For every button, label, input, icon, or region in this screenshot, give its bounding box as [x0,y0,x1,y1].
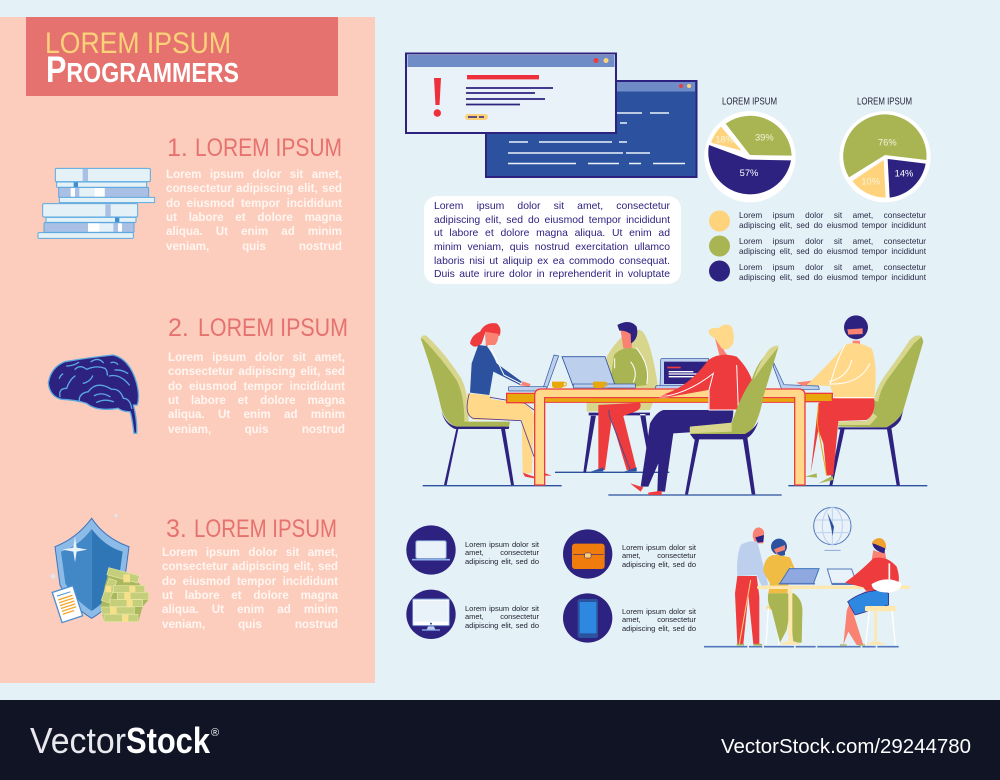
body text 2 [168,351,345,436]
pie chart 1 [704,96,796,202]
legend text green: adipiscing elit, sed do eiusmod tempor incididunt [739,246,926,256]
pie chart 2: 14% [895,168,913,178]
laptop text: adipiscing elit, sed do [465,557,539,566]
image id: VectorStock.com/29244780 [721,735,971,758]
body text 3: Lorem ipsum dolor sit amet, [162,546,338,559]
briefcase text: amet, consectetur [622,551,696,560]
legend text green [739,236,926,256]
pie chart 1: 57% [740,168,758,178]
pie chart 2: 76% [878,138,897,148]
standing man [735,527,768,645]
body text 3: aliqua. Ut enim ad minim [162,603,338,616]
briefcase text [622,543,696,569]
section 1 [38,134,342,253]
pie chart 2 [839,96,931,202]
heading 3: 3. [166,515,187,543]
body text 3: consectetur adipiscing elit, sed [162,560,338,573]
table and laptops [759,569,908,645]
illustration: small team meeting with globe clock [704,506,910,648]
floor lines [423,472,927,495]
pie chart 1: LOREM IPSUM [722,96,777,108]
heading 3: LOREM IPSUM [194,515,337,543]
card paragraph: Duis aute irure dolor in reprehenderit in voluptate [434,269,670,280]
laptop text [465,540,539,566]
chair behind, person 2 [583,330,658,472]
legend text yellow: adipiscing elit, sed do eiusmod tempor incididunt [739,221,926,230]
body text 1 [166,168,342,253]
card paragraph: laboris nisi ut aliquip ex ea commodo consequat. [434,256,670,267]
chair left [421,335,514,485]
body text 1: ut labore et dolore magna [166,211,342,224]
body text 2: Lorem ipsum dolor sit amet, [168,351,345,364]
legend text navy: Lorem ipsum dolor sit amet, consectetur [739,262,926,272]
icon: laptop [406,525,456,575]
monitor text: Lorem ipsum dolor sit [465,604,539,613]
card paragraph: ut labore et dolore magna aliqua. Ut enim ad [434,228,670,239]
laptop text: amet, consectetur [465,548,539,557]
legend text navy: adipiscing elit, sed do eiusmod tempor incididunt [739,272,926,282]
illustration: team working at big table [420,315,928,496]
heading 1: 1. [167,134,188,162]
legend text yellow: Lorem ipsum dolor sit amet, consectetur [739,211,926,220]
icon: brain [48,355,139,433]
heading 1: LOREM IPSUM [195,134,342,162]
logo: Vector [30,720,126,761]
body text 1: aliqua. Ut enim ad minim [166,225,342,238]
phone text: Lorem ipsum dolor sit [622,607,696,616]
body text 1: Lorem ipsum dolor sit amet, [166,168,342,181]
panel: left column [0,17,375,683]
illustration: code window behind and alert window in front [405,52,698,178]
icon: monitor [406,590,456,639]
legend [709,210,926,282]
blond man and front chair [630,325,778,495]
card paragraph: adipiscing elit, sed do eiusmod tempor incididunt [434,215,670,226]
card paragraph [434,201,670,280]
pie chart 2: LOREM IPSUM [857,96,912,108]
legend text navy [739,262,926,282]
person 2 [591,322,648,472]
pie chart 1: 18% [715,134,734,144]
logo [30,720,219,761]
laptop text: Lorem ipsum dolor sit [465,540,539,549]
section 3 [50,514,338,631]
icon: briefcase [563,529,612,579]
section 2 [48,314,348,436]
text box: white card [424,196,681,284]
woman with red hair [467,323,552,478]
phone text [622,607,696,633]
feature: smartphone [563,593,696,643]
table [507,389,832,485]
alert window [406,54,616,133]
card paragraph: minim veniam, quis nostrud exercitation ullamco [434,242,670,253]
pie chart 1: 39% [755,133,774,143]
heading 2: 2. [168,314,189,342]
body text 2: aliqua. Ut enim ad minim [168,408,345,421]
body text 2: do eiusmod tempor incididunt [168,380,345,393]
logo: ® [211,727,219,739]
white chair [865,563,902,645]
feature: desktop monitor [406,590,539,639]
body text 3: do eiusmod tempor incididunt [162,575,338,588]
feature: briefcase [563,529,696,579]
icon: stacked books [38,168,155,238]
body text 2: consectetur adipiscing elit, sed [168,365,345,378]
phone text: amet, consectetur [622,615,696,624]
body text 3: ut labore et dolore magna [162,589,338,602]
monitor text: adipiscing elit, sed do [465,621,539,630]
body text 1: consectetur adipiscing elit, sed [166,182,342,195]
footer bar [0,700,1000,780]
body text 3: veniam, quis nostrud [162,618,338,631]
heading 2: LOREM IPSUM [198,314,348,342]
card paragraph: Lorem ipsum dolor sit amet, consectetur [434,201,670,212]
pie chart 2: 10% [861,176,880,186]
logo: Stock [126,720,211,761]
floor [704,644,899,649]
seated man in yellow [763,539,802,645]
title banner [26,17,338,96]
body text 2: ut labore et dolore magna [168,394,345,407]
briefcase text: adipiscing elit, sed do [622,560,696,569]
legend text green: Lorem ipsum dolor sit amet, consectetur [739,236,926,246]
body text 2: veniam, quis nostrud [168,423,345,436]
title banner: LOREM IPSUM [45,27,231,60]
phone text: adipiscing elit, sed do [622,624,696,633]
bearded man and chair right [773,315,923,486]
monitor text: amet, consectetur [465,612,539,621]
body text 1: do eiusmod tempor incididunt [166,197,342,210]
body text 3 [162,546,338,631]
body text 1: veniam, quis nostrud [166,240,342,253]
globe clock [814,507,851,550]
legend text yellow [739,211,926,230]
laptops and cups [508,355,711,391]
feature: laptop [406,525,539,575]
briefcase text: Lorem ipsum dolor sit [622,543,696,552]
icon: shield with money [51,514,149,623]
seated woman with orange cap [840,538,899,645]
legend swatches [709,210,730,282]
code window [486,81,696,177]
monitor text [465,604,539,630]
title banner: PROGRAMMERS [46,49,239,90]
icon: phone [563,593,612,643]
